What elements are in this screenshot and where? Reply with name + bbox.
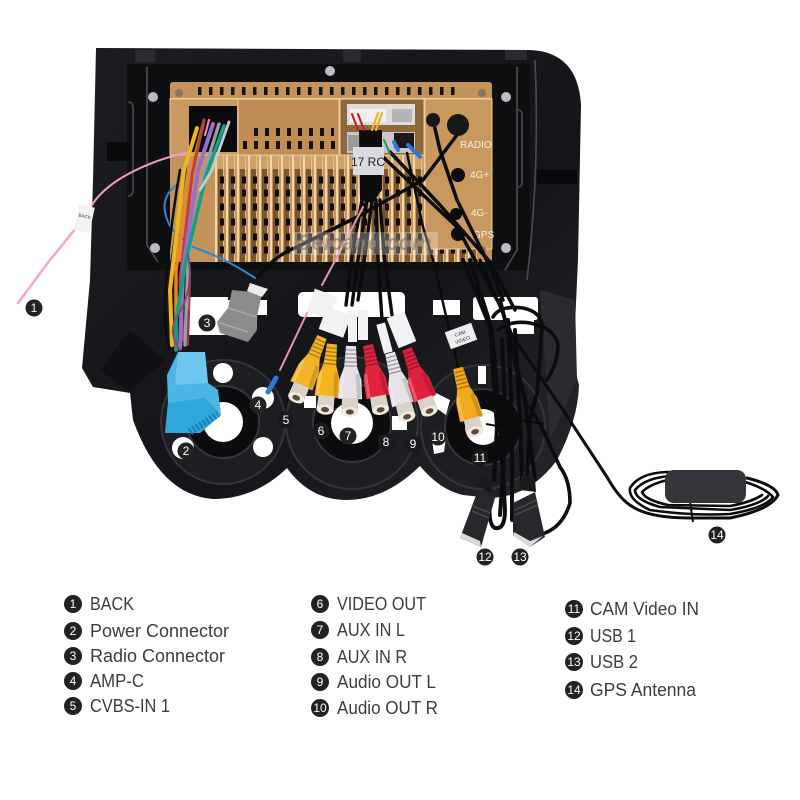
plug sockets <box>189 106 237 152</box>
legend item 12 <box>565 626 636 646</box>
callout 4 <box>250 396 266 414</box>
lower frame windows <box>188 292 538 335</box>
left connector panel <box>170 99 238 155</box>
callout 12: 12 <box>478 550 492 564</box>
callout 8 <box>378 434 394 450</box>
dial lobe rings and holes <box>161 357 545 489</box>
legend column 1 <box>64 594 229 716</box>
RCA connector: video out yellow 1 <box>283 332 333 407</box>
head unit rear frame <box>82 48 581 500</box>
silver band tag: 17 RC <box>351 155 385 169</box>
legend item 5: CVBS-IN 1 <box>90 696 170 716</box>
port labels: 4G- <box>471 208 488 219</box>
callout 4: 4 <box>255 398 262 412</box>
callout 10: 10 <box>431 430 445 444</box>
middle plate panel <box>238 99 339 155</box>
RCA connector: video out yellow 2 <box>313 343 344 416</box>
CAM tag: VIDEO <box>454 335 471 346</box>
legend item 11: CAM Video IN <box>590 599 699 619</box>
legend item 5: 5 <box>70 699 77 713</box>
callout 13: 13 <box>513 550 527 564</box>
RCA connector: aux R red <box>356 343 393 417</box>
callout 5: 5 <box>283 413 290 427</box>
BACK tag: BACK <box>78 213 91 220</box>
connector sockets panel <box>340 99 424 155</box>
legend item 2: 2 <box>70 624 77 638</box>
legend column 3 <box>565 599 699 700</box>
callout 2 <box>178 442 194 460</box>
callout 1: 1 <box>31 301 38 315</box>
legend item 1: 1 <box>70 597 77 611</box>
legend item 9: Audio OUT L <box>337 672 436 692</box>
CAM tag <box>445 323 477 349</box>
blue AMP loop wire <box>165 184 255 278</box>
legend item 8: AUX IN R <box>337 647 407 667</box>
BACK tag <box>74 204 95 233</box>
callout 8: 8 <box>383 435 390 449</box>
pink amp wire <box>322 207 363 285</box>
pink BACK wire <box>18 152 190 303</box>
legend item 14: 14 <box>567 683 581 697</box>
callout 6: 6 <box>318 424 325 438</box>
RCA connector: audio R red <box>396 345 443 420</box>
legend item 7: AUX IN L <box>337 620 405 640</box>
center cable bundle <box>322 113 420 320</box>
legend item 3: Radio Connector <box>90 646 225 666</box>
callout 13 <box>512 548 528 566</box>
legend item 1 <box>64 594 134 614</box>
USB 2 plug <box>513 475 545 547</box>
legend column 2 <box>311 594 438 718</box>
callout 3 <box>198 314 216 332</box>
cable tags <box>307 289 416 354</box>
legend item 3: 3 <box>70 649 77 663</box>
callout 7: 7 <box>345 429 352 443</box>
heat shrink sleeve <box>359 130 382 203</box>
legend item 4: 4 <box>70 674 77 688</box>
radio connector (grey) <box>217 283 268 342</box>
callout 14: 14 <box>710 528 724 542</box>
callout 2: 2 <box>183 444 190 458</box>
port labels: 4G+ <box>470 170 489 181</box>
legend item 11: 11 <box>568 602 581 616</box>
port labels: GPS <box>473 230 494 241</box>
legend item 7: 7 <box>317 623 324 637</box>
legend item 9: 9 <box>317 675 324 689</box>
legend item 6: VIDEO OUT <box>337 594 426 614</box>
callout 1 <box>26 300 42 316</box>
legend item 4: AMP-C <box>90 671 144 691</box>
port labels <box>460 140 494 241</box>
GPS antenna cable and coil <box>480 260 778 522</box>
fin tops <box>215 155 477 169</box>
port labels: RADIO <box>460 140 492 151</box>
legend item 8: 8 <box>317 650 324 664</box>
callout 7 <box>340 428 356 444</box>
USB cable loops <box>463 260 570 533</box>
power connector (blue) <box>165 352 221 433</box>
legend item 12: 12 <box>567 629 581 643</box>
fin grid <box>215 155 477 262</box>
main wiring harness <box>165 120 229 350</box>
legend item 13: 13 <box>567 655 581 669</box>
legend item 8 <box>311 647 407 667</box>
callout 3: 3 <box>204 316 211 330</box>
callout 12 <box>476 548 494 566</box>
wire for AMP-C and blue tip <box>268 313 307 392</box>
legend item 13 <box>565 652 638 672</box>
top ventilation slots <box>198 87 462 95</box>
RCA connector: aux L white <box>338 346 363 417</box>
callout 10 <box>430 428 446 446</box>
legend item 10: 10 <box>313 701 327 715</box>
gold metal back plate <box>170 82 494 262</box>
callout 5 <box>278 412 294 428</box>
callout 6 <box>312 422 330 440</box>
callout 11: 11 <box>474 451 487 465</box>
black wires from rear ports <box>258 113 515 367</box>
legend item 6: 6 <box>317 597 324 611</box>
RCA connector: camera video in yellow <box>446 365 488 440</box>
USB 1 plug <box>460 476 495 547</box>
callout 11 <box>472 450 488 466</box>
legend item 1: BACK <box>90 594 134 614</box>
legend item 7 <box>311 620 405 640</box>
vent hole rows <box>220 180 470 250</box>
silver band tag <box>351 147 385 175</box>
GPS antenna block <box>665 470 746 503</box>
watermark: Seicane.com <box>297 230 432 255</box>
legend item 14: GPS Antenna <box>590 680 697 700</box>
legend item 4 <box>64 671 144 691</box>
RCA connector: audio L white <box>378 350 420 425</box>
callout 9: 9 <box>410 437 417 451</box>
callout 9 <box>404 436 422 452</box>
legend item 12: USB 1 <box>590 626 636 646</box>
antenna port panel <box>425 99 494 249</box>
CAM tag: CAM <box>454 329 467 339</box>
legend item 13: USB 2 <box>590 652 638 672</box>
callout 14 <box>708 526 726 544</box>
legend item 2: Power Connector <box>90 621 229 641</box>
legend item 10: Audio OUT R <box>337 698 438 718</box>
